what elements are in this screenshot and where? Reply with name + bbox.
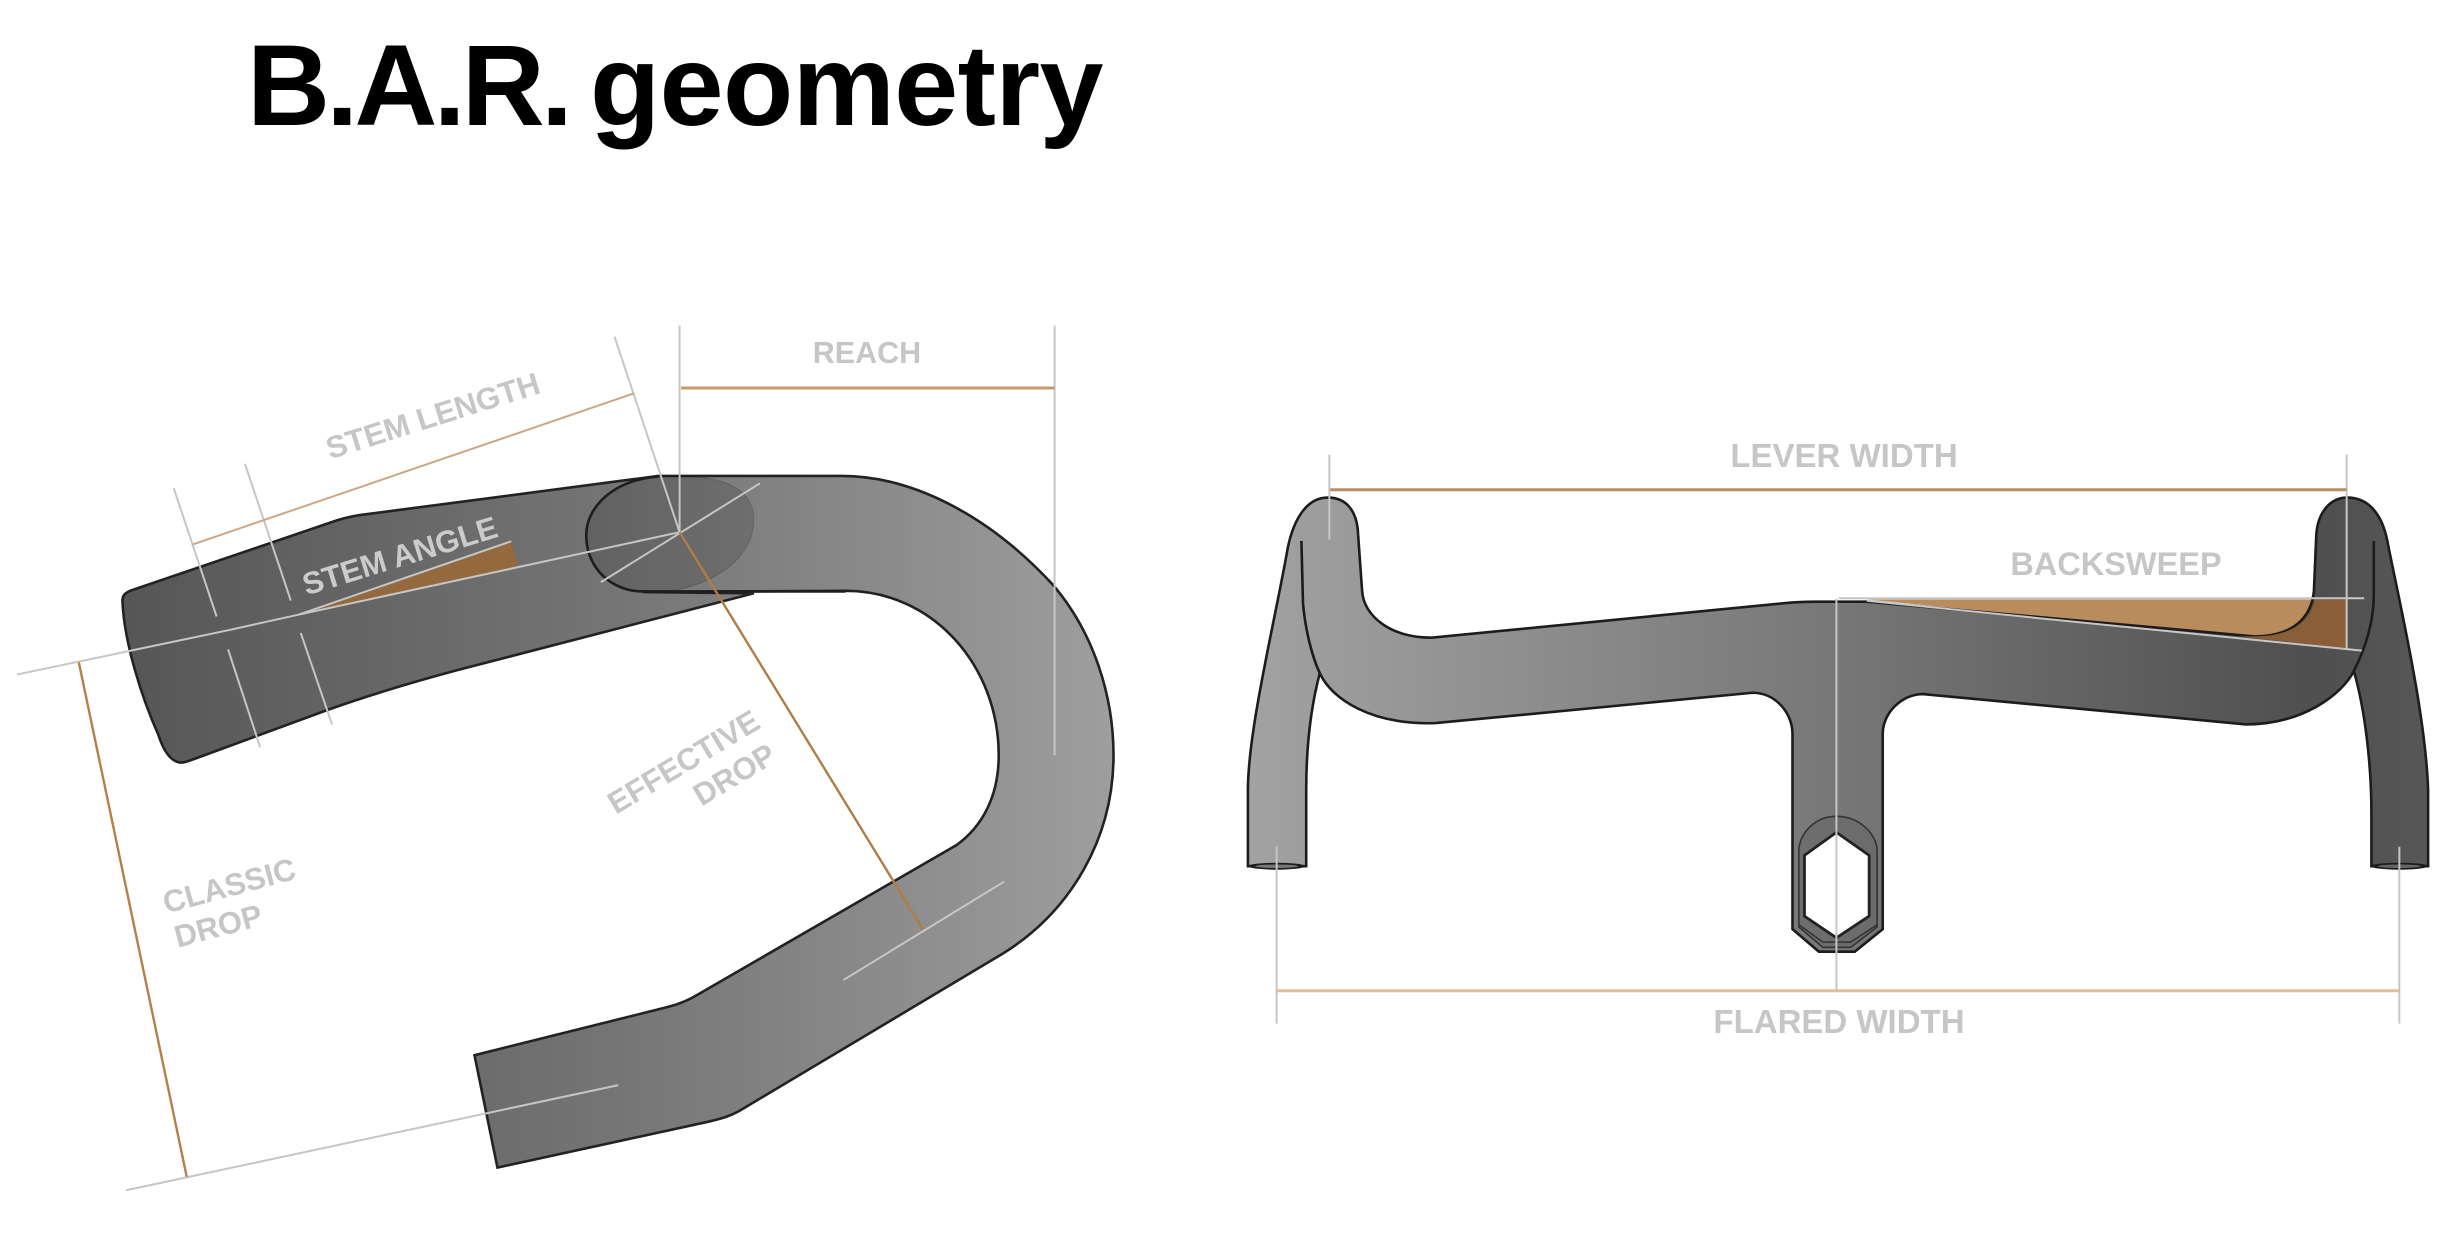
backsweep dark wedge	[2238, 600, 2347, 648]
handlebar side profile	[122, 476, 1114, 1168]
dimension line: lever width	[1330, 488, 2347, 491]
label: classic drop: CLASSIC	[159, 851, 300, 920]
label: backsweep: BACKSWEEP	[2010, 546, 2222, 582]
stem angle wedge	[298, 541, 518, 615]
label: effective drop: EFFECTIVE	[601, 703, 766, 821]
orange dimension lines	[79, 388, 1055, 1177]
label: lever width: LEVER WIDTH	[1730, 437, 1958, 474]
title: B.A.R.	[247, 22, 569, 150]
steerer clamp opening	[1799, 816, 1877, 947]
panel: side view of handlebar	[17, 326, 1114, 1190]
label: flared width: FLARED WIDTH	[1713, 1003, 1965, 1040]
label: stem length: STEM LENGTH	[322, 366, 544, 466]
dimension line: flared width	[1277, 989, 2399, 992]
title: geometry	[590, 22, 1104, 150]
label: classic drop: DROP	[171, 898, 266, 955]
measurement guide lines	[1277, 455, 2399, 1024]
label: reach: REACH	[813, 336, 921, 370]
backsweep light wedge	[1867, 600, 2315, 637]
drop end openings	[1248, 863, 2428, 870]
handlebar front profile	[1248, 498, 2428, 952]
label: stem angle: STEM ANGLE	[298, 510, 502, 602]
measurement guide lines	[17, 326, 1055, 1190]
panel: front view of handlebar	[1248, 437, 2428, 1040]
label: classic drop	[159, 851, 309, 955]
label: effective drop: DROP	[687, 737, 782, 813]
